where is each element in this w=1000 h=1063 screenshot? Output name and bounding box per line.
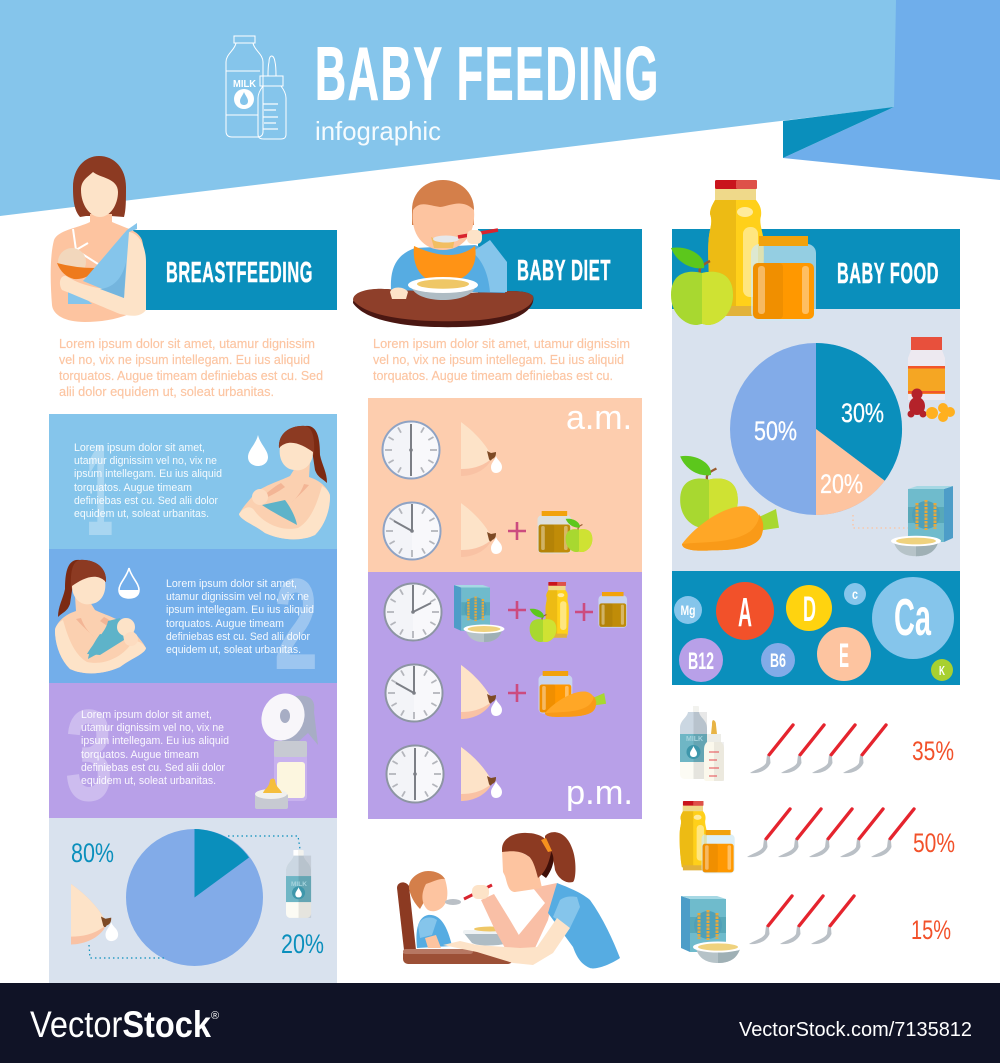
step 3 text: equidem ut, soleat urbanitas. [81,775,216,787]
clock 10:00 [384,502,440,560]
icon: breast [71,884,118,944]
clock 10:00 [386,664,442,722]
vitamin B12: B12 [688,648,714,675]
icon: milk and baby bottle [680,706,724,781]
plus [508,601,526,619]
icon: jar [598,592,627,628]
panel: baby food pie [672,309,960,571]
a.m. label: a.m. [566,399,632,437]
icon: juice and jar [680,801,735,873]
title: BABY FEEDING [315,32,660,116]
spoons [750,725,886,773]
vitamin D [786,585,832,631]
step 2 text [166,578,314,656]
subtitle: infographic [315,116,441,146]
text block: breastfeeding intro: torquatos. Augue timeam definiebas est cu. Sed [59,369,323,383]
panel: breast milk vs formula pie [49,818,337,983]
icon: milk and baby bottle: MILK [686,736,703,743]
icon: juice and apple [530,582,569,642]
step 2 text: Lorem ipsum dolor sit amet, [166,578,297,590]
icon: milk and feeding bottles outline: MILK [233,78,256,90]
vitamin Mg [674,596,702,624]
mineral Ca: Ca [894,589,932,647]
dotted connectors [89,836,300,958]
icon: breast [461,503,502,557]
step 1 text: torquatos. Augue timeam [74,482,192,494]
vitamin Mg: Mg [680,602,696,618]
icon: breastfeeding mother with baby, empty drop [55,560,146,673]
heading: breastfeeding: BREASTFEEDING [166,257,313,289]
panel: afternoon schedule [368,572,642,819]
panel: morning schedule [368,398,642,572]
label 20%: 20% [820,469,863,499]
icon: gummy vitamins bottle [908,337,955,422]
registered mark: ® [211,1010,219,1022]
plus [508,522,526,540]
step 3 text: utamur dignissim vel no, vix ne [81,722,224,734]
text block: baby diet intro: torquatos. Augue timeam definiebas est cu. [373,369,613,383]
step 1 text: equidem ut, soleat urbanitas. [74,508,209,520]
step 2 text: torquatos. Augue timeam [166,618,284,630]
text block: breastfeeding intro: alii dolor equidem ut, soleat urbanitas. [59,385,274,399]
mineral Ca [872,577,954,659]
row: cereal portion [681,896,951,963]
step 3 text: Lorem ipsum dolor sit amet, [81,709,212,721]
spoons [749,896,854,944]
heading: baby food [672,229,960,309]
label 30%: 30% [841,398,884,428]
text block: breastfeeding intro: Lorem ipsum dolor sit amet, utamur dignissim [59,337,315,351]
step 2 text: definiebas est cu. Sed alii dolor [166,631,310,643]
spoons [747,809,914,857]
step 3 text: definiebas est cu. Sed alii dolor [81,762,225,774]
icon: cereal and bowl [454,585,504,642]
icon: milk and feeding bottles outline [226,36,286,139]
step 1 text: utamur dignissim vel no, vix ne [74,455,217,467]
footer logo: VectorStock [30,1004,211,1045]
label 15%: 15% [911,915,951,945]
pie chart [730,343,902,515]
panel: vitamins [672,571,960,685]
header banner [0,0,1000,216]
heading: baby diet [478,229,642,309]
icon: mother feeding child in high chair [397,832,620,968]
icon: jar and carrot [539,671,606,717]
icon: breast [461,422,502,476]
heading: baby diet: BABY DIET [517,255,611,287]
icon: jar and apple [538,511,592,554]
step 2 text: ipsum intellegam. Eu ius aliquid [166,604,314,616]
panel: step 1: 1 [86,417,113,563]
icon: breast [461,665,502,719]
step 1 text: definiebas est cu. Sed alii dolor [74,495,218,507]
text block: baby diet intro: Lorem ipsum dolor sit amet, utamur dignissim [373,337,630,351]
clock 2:00 [384,584,442,640]
label 50%: 50% [754,416,797,446]
vitamin B6 [761,643,795,677]
step 3 text: torquatos. Augue timeam [81,749,199,761]
icon: breast [461,747,502,801]
icon: baby eating at table [353,180,533,327]
label 80%: 80% [71,838,114,868]
step 3 text: ipsum intellegam. Eu ius aliquid [81,735,229,747]
icon: juice, jar and apple [671,180,816,325]
step 2 text: utamur dignissim vel no, vix ne [166,591,309,603]
heading: breastfeeding [133,230,337,310]
pie chart [126,829,263,966]
vitamin E [817,627,871,681]
footer [0,983,1000,1063]
vitamin C [844,583,866,605]
step 3 text [81,709,229,787]
step 1 text: ipsum intellegam. Eu ius aliquid [74,468,222,480]
label 20%: 20% [281,929,324,959]
panel: step 3 [49,682,337,828]
step number 2: 2 [274,551,318,697]
icon: milk bottle [286,850,311,918]
footer url: VectorStock.com/7135812 [739,1019,972,1041]
vitamin D: D [803,590,816,629]
vitamin K [931,659,953,681]
vitamin B12 [679,638,723,682]
icon: apple and carrot [680,456,779,551]
panel: step 1 [49,414,337,563]
text block: baby diet intro [373,337,630,383]
icon: breastfeeding mother, full drop [239,426,330,539]
vitamin K: K [939,663,945,678]
vitamin A [716,582,774,640]
icon: breast pump [254,686,318,809]
connector [853,515,908,528]
icon: cereal and bowl [681,896,743,963]
text block: baby diet intro: vel no, vix ne ipsum intellegam. Eu ius aliquid [373,353,624,367]
icon: mother with sling [51,156,146,322]
row: juice and jar portion [680,801,955,873]
clock 6:00 [386,746,444,802]
vitamin E: E [839,637,849,675]
label 50%: 50% [913,828,955,858]
panel: step 2 [49,549,337,697]
step 2 text: equidem ut, soleat urbanitas. [166,644,301,656]
text block: breastfeeding intro: vel no, vix ne ipsum intellegam. Eu ius aliquid [59,353,310,367]
step 1 text: Lorem ipsum dolor sit amet, [74,442,205,454]
clock 6:00 [382,422,440,478]
vitamin A: A [738,589,752,635]
p.m. label: p.m. [566,774,633,812]
vitamin C: c [852,586,858,602]
step number 3: 3 [65,682,113,828]
icon: milk bottle: MILK [291,881,307,888]
plus [508,684,526,702]
plus [575,603,593,621]
icon: cereal and bowl [891,486,953,556]
row: milk portion [680,706,954,781]
text block: breastfeeding intro [59,337,323,399]
label 35%: 35% [912,736,954,766]
step 1 text [74,442,222,520]
vitamin B6: B6 [770,651,786,672]
